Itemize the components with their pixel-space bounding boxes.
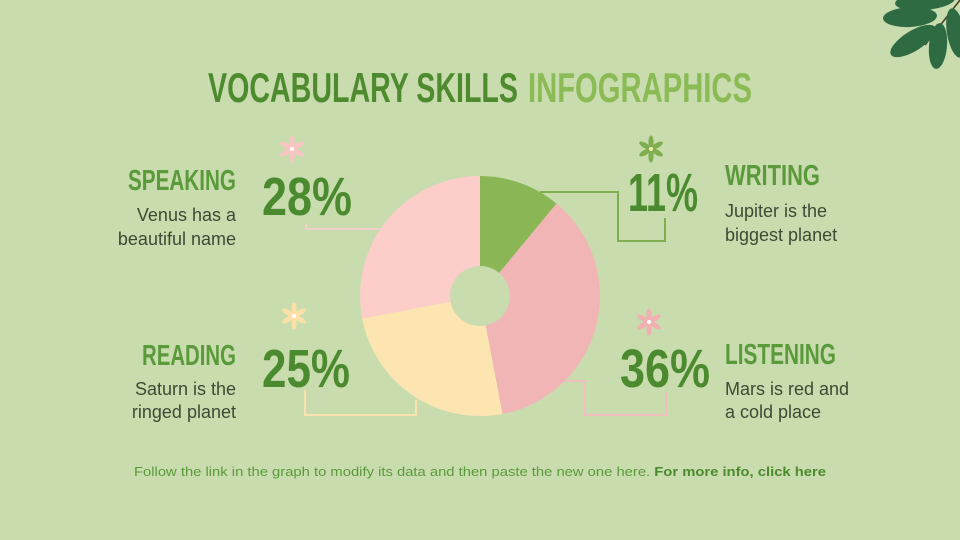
donut chart <box>360 176 600 416</box>
footer: Follow the link in the graph to modify its data and then paste the new one here. For more info, click here <box>134 465 826 479</box>
percentages: 28% <box>262 167 352 227</box>
icon: flower writing <box>638 136 664 162</box>
headings: WRITING <box>725 160 820 192</box>
percentages: 11% <box>628 163 698 223</box>
body text: biggest planet <box>725 225 837 245</box>
headings: READING <box>142 340 236 372</box>
icon: flower reading <box>281 302 307 330</box>
percentages: 36% <box>620 339 710 399</box>
title: INFOGRAPHICS <box>528 64 752 111</box>
icon: flower speaking <box>279 136 305 162</box>
headings: SPEAKING <box>128 165 236 197</box>
decoration: leaves top right <box>883 0 960 70</box>
icon: flower listening <box>636 308 662 336</box>
body text: beautiful name <box>118 229 236 249</box>
headings: LISTENING <box>725 339 836 371</box>
body text <box>118 201 849 422</box>
percentages: 25% <box>262 339 350 399</box>
connector lines <box>305 192 666 415</box>
body text: Mars is red and <box>725 379 849 399</box>
title: VOCABULARY SKILLS <box>208 64 518 111</box>
body text: Saturn is the <box>135 379 236 399</box>
body text: Venus has a <box>137 205 237 225</box>
body text: ringed planet <box>132 402 236 422</box>
percentages <box>262 163 710 399</box>
body text: Jupiter is the <box>725 201 827 221</box>
body text: a cold place <box>725 402 821 422</box>
headings <box>128 160 836 372</box>
